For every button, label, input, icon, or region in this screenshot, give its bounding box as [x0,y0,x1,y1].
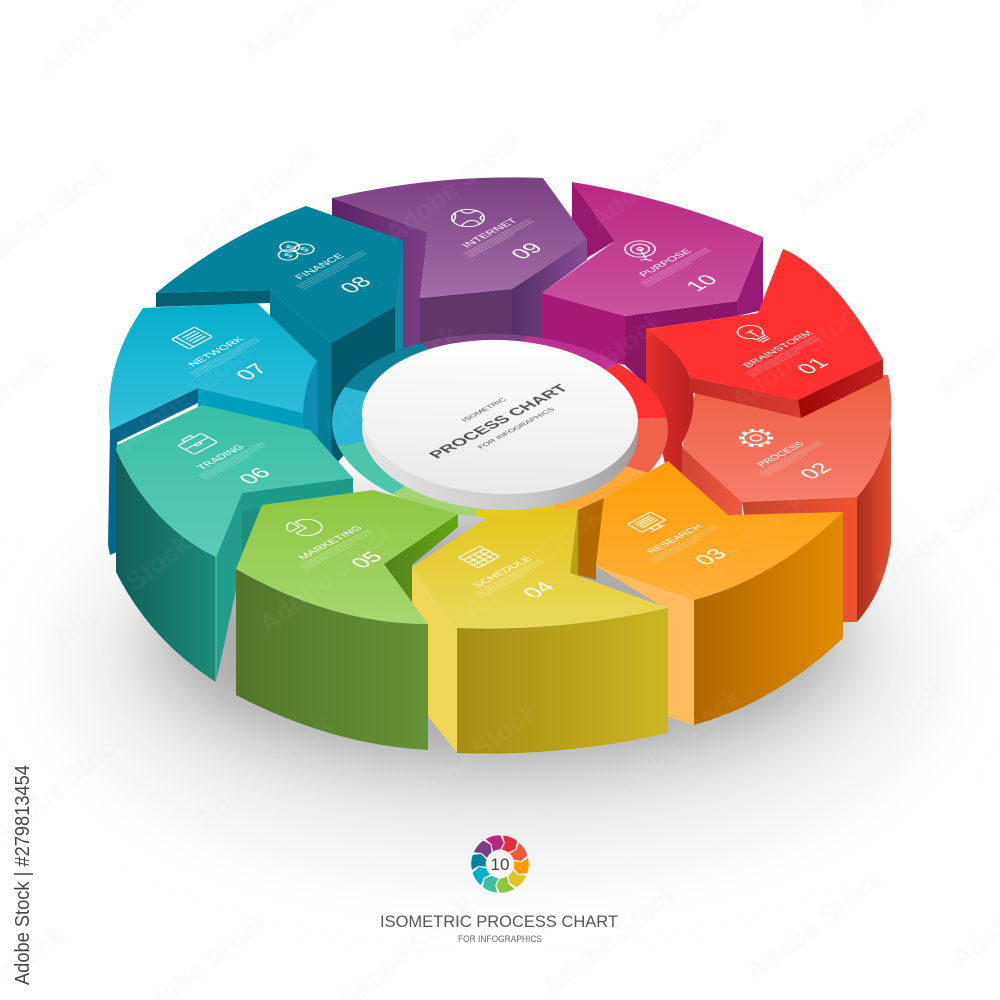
title: NETWORK [186,335,248,368]
segment 03: research faces [578,461,843,725]
segment 04: schedule faces [412,507,668,754]
description lines [744,336,822,378]
description lines [758,441,825,477]
segment 01: brainstorm faces [646,249,883,482]
segment 08 content: finance [268,237,377,296]
disc label: for infographics: FOR INFOGRAPHICS [477,407,558,450]
segment 05: marketing faces [236,490,458,750]
icon: light bulb [732,323,775,345]
icon: gear [735,427,777,449]
disc edge [359,347,641,515]
icon: pie chart [281,515,328,540]
segment 07: network faces [108,303,318,555]
number: 10 [680,271,723,294]
logo badge [470,834,530,894]
segment 02: process faces [682,375,891,622]
isometric process chart infographic [14,177,943,985]
number: 01 [791,354,834,377]
title: INTERNET [460,217,521,249]
icon: coins [268,237,318,264]
icon: coins: $ [282,252,297,260]
central disc [359,335,641,515]
segment 09 content: internet [445,206,548,262]
disc label: process chart: PROCESS CHART [426,382,573,461]
title: SCHEDULE [471,555,536,589]
title: TRADING [195,443,247,471]
number: 06 [233,464,276,487]
segment 06: trading faces [116,405,353,682]
segment 07 content: network [172,327,273,383]
description lines [640,248,713,287]
number: 09 [505,239,548,262]
segment 10: purpose faces [542,182,763,385]
disc top face [359,335,641,499]
segment 09: internet faces [332,177,587,350]
icon: globe [445,206,491,230]
bottom heading: ISOMETRIC PROCESS CHART [380,912,618,931]
description lines [296,251,369,290]
title: PURPOSE [637,247,695,278]
title: FINANCE [293,252,348,281]
bottom sub-heading: FOR INFOGRAPHICS [458,934,542,945]
logo badge: 10 [491,855,509,874]
segment 08: finance faces [156,206,403,490]
watermark pattern over chart [0,0,1000,800]
segment 01 content: brainstorm [732,323,834,378]
segment 05 notch face [384,514,458,610]
number: 03 [689,545,732,568]
icon: calendar [458,546,500,568]
disc label: isometric: ISOMETRIC [461,397,509,423]
segment 04 content: schedule [458,546,560,601]
description lines [474,559,547,598]
number: 04 [517,578,560,601]
icon: coins: $ [298,246,313,254]
description lines [648,525,721,564]
icon: target [619,238,667,264]
description lines [189,338,262,377]
stock id side label: Adobe Stock | #279813454 [12,765,34,985]
icon: briefcase [175,432,217,454]
description lines [463,219,536,258]
number: 05 [345,548,388,571]
inner colour ring [332,334,668,518]
description lines [198,442,269,480]
title: RESEARCH [645,523,706,555]
soft ground shadow [80,470,920,850]
segment 10 back notch [572,182,615,262]
segment 10 content: purpose [619,238,723,294]
description lines [299,529,375,570]
segment 03 content: research [628,512,732,568]
icon: coins: $ [284,243,299,251]
segment 06 content: trading [175,432,276,487]
title: MARKETING [296,524,366,561]
number: 08 [334,273,377,296]
icon: server panel [172,327,212,349]
number: 07 [230,360,273,383]
segment 05 content: marketing [281,515,388,571]
icon: monitor [628,512,669,534]
segment 02 content: process [735,427,837,482]
number: 02 [794,459,837,482]
title: BRAINSTORM [741,329,816,369]
title: PROCESS [755,440,808,468]
